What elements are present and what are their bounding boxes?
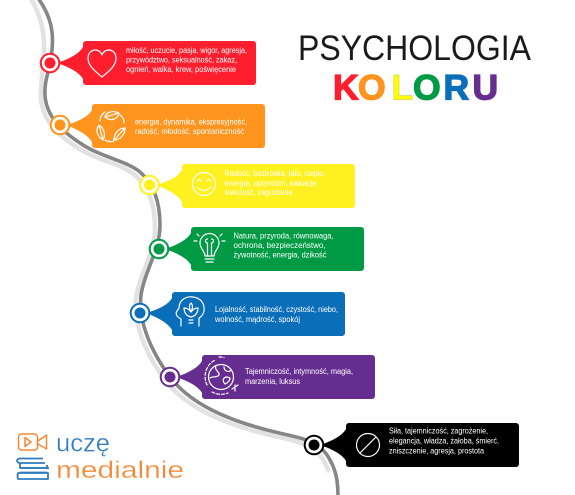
text block: żywotność, energia, dzikość [234, 250, 326, 260]
panel: green [149, 227, 364, 271]
text block [245, 367, 353, 386]
node [130, 303, 150, 323]
winding path [38, 0, 338, 495]
heading: KOLORU: KOLORU [333, 68, 498, 108]
callout box [320, 423, 519, 467]
text block: marzenia, luksus [245, 377, 300, 386]
text block [234, 232, 334, 260]
text block: miłość, uczucie, pasja, wigor, agresja, [126, 46, 247, 55]
node [50, 115, 70, 135]
text block: Natura, przyroda, równowaga, [234, 232, 334, 240]
text block [214, 305, 338, 324]
text block: energia, dynamika, ekspresyjność, [135, 118, 247, 126]
text block [126, 46, 247, 74]
icon: light bulb [194, 234, 225, 262]
text block: Radość, beztroska, lato, ciepło, [224, 169, 326, 178]
text block: przywództwo, seksualność, zakaz, [126, 56, 237, 65]
text block: radość, młodość, spontaniczność [135, 127, 244, 136]
text block: Lojalność, stabilność, czystość, niebo, [215, 305, 338, 314]
panel: blue [130, 292, 345, 336]
panel: yellow [139, 164, 355, 208]
text block: ochrona, bezpieczeństwo, [234, 241, 326, 250]
text block [135, 118, 247, 136]
icon: books [17, 458, 49, 479]
panel: purple [160, 355, 375, 399]
icon: heart [88, 50, 116, 77]
callout box [165, 227, 364, 271]
callout box [156, 164, 355, 208]
callout box [146, 292, 345, 336]
logo [17, 430, 184, 484]
node [139, 175, 160, 195]
text block: Tajemniczość, intymność, magia, [245, 367, 353, 376]
text block: energia, optymizm, wakacje, [224, 179, 318, 188]
text block: ognień, walka, krew, poświęcenie [126, 65, 237, 74]
node [160, 367, 180, 387]
icon: video camera [18, 434, 46, 450]
icon: head with lotus [176, 297, 204, 326]
title [298, 28, 531, 108]
icon: smiling face [192, 172, 216, 196]
icon: globe with plane [205, 357, 238, 394]
callout box [57, 41, 256, 85]
node [40, 53, 60, 73]
panel: orange [50, 104, 265, 148]
panel: black [304, 423, 519, 467]
text block [224, 169, 326, 197]
text block: wolność, mądrość, spokój [214, 315, 300, 324]
heading: PSYCHOLOGIA: PSYCHOLOGIA [298, 28, 531, 68]
text block: elegancja, władza, żałoba, śmierć, [389, 436, 499, 446]
node [304, 435, 324, 455]
logo word: uczę: uczę [56, 430, 110, 458]
node [149, 239, 169, 259]
text block: zniszczenie, agresja, prostota [389, 446, 484, 456]
callout box [176, 355, 375, 399]
panel: red [40, 41, 256, 85]
icon: prohibited sign [356, 434, 380, 456]
text block: Siła, tajemniczość, zagrożenie, [389, 426, 488, 436]
text block: świeżość, zagrożenie [224, 188, 293, 197]
text block [389, 426, 499, 456]
winding path shadow [31, 0, 329, 472]
logo word: medialnie: medialnie [56, 457, 184, 484]
icon: recycling leaves [97, 112, 125, 142]
callout box [66, 104, 265, 148]
